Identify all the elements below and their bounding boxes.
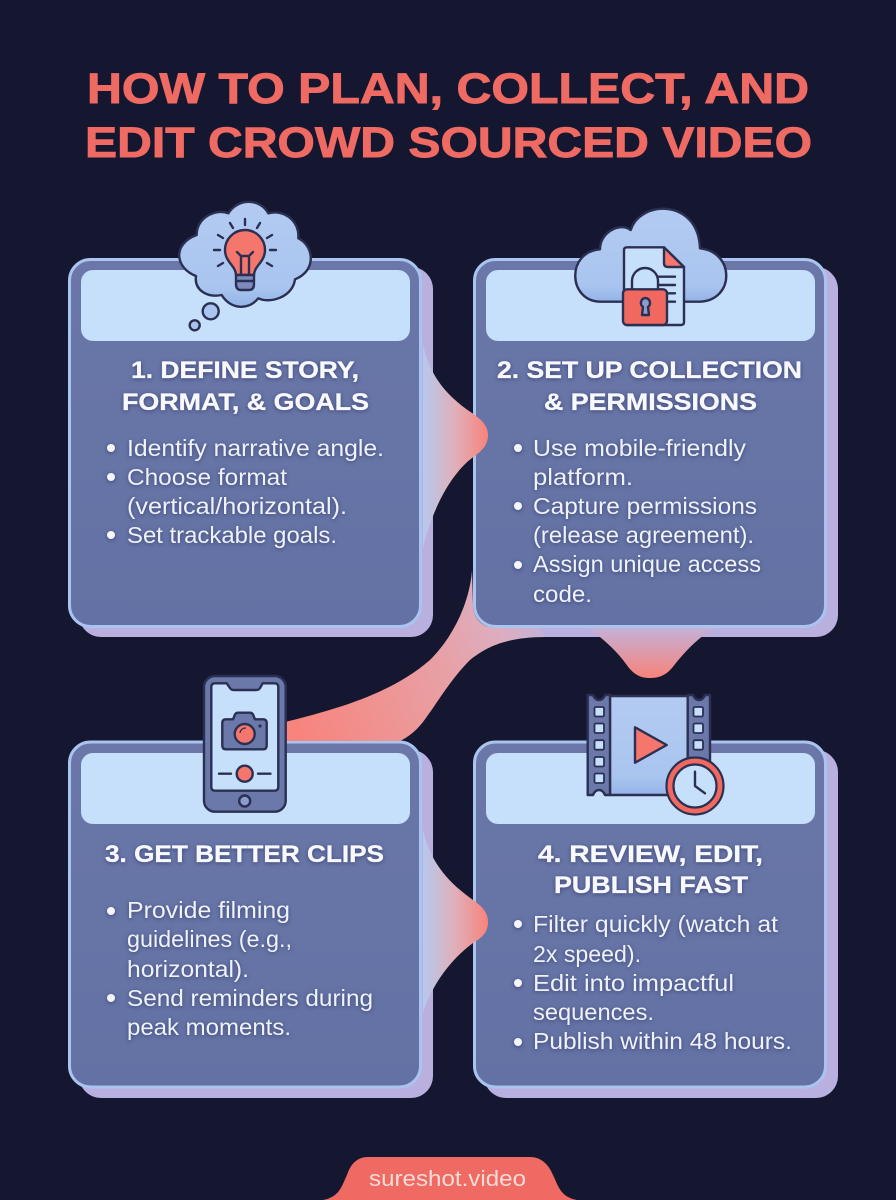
bullet list: step 1	[107, 435, 384, 548]
bullet list: step 4: Filter quickly (watch at	[533, 911, 778, 937]
bullet list: step 2: Use mobile-friendly	[533, 435, 746, 461]
bullet list: step 4: sequences.	[533, 999, 654, 1025]
title: EDIT CROWD SOURCED VIDEO	[85, 119, 812, 167]
panel: step 4 card	[474, 742, 838, 1098]
bullet list: step 3	[107, 897, 373, 1040]
arrow: step 2 to step 3	[285, 570, 545, 741]
bullet list: step 4: Edit into impactful	[533, 970, 734, 996]
heading: step 3: 3. GET BETTER CLIPS	[105, 841, 384, 868]
bullet list: step 4: 2x speed).	[533, 941, 641, 967]
title: HOW TO PLAN, COLLECT, AND	[87, 65, 809, 113]
icon: light bulb in thought cloud	[179, 202, 311, 330]
bullet list: step 3: peak moments.	[127, 1014, 291, 1040]
panel: step 2 card	[474, 260, 838, 637]
bullet list: step 1: Choose format	[127, 464, 287, 490]
heading: step 1: FORMAT, & GOALS	[122, 389, 369, 416]
bullet list: step 2: (release agreement).	[533, 522, 754, 548]
heading: step 2: & PERMISSIONS	[544, 389, 757, 416]
bullet list: step 2: Assign unique access	[533, 551, 761, 577]
bullet list: step 4	[514, 911, 792, 1054]
heading: step 1: 1. DEFINE STORY,	[131, 357, 359, 384]
bullet list: step 3: Send reminders during	[127, 985, 373, 1011]
icon: film strip with play button and clock	[588, 695, 724, 814]
heading: step 4: 4. REVIEW, EDIT,	[538, 841, 763, 868]
heading: step 2: 2. SET UP COLLECTION	[497, 357, 802, 384]
bullet list: step 2: platform.	[533, 464, 633, 490]
bullet list: step 1: Set trackable goals.	[127, 522, 337, 548]
arrow: step 2 to step 4	[588, 628, 714, 678]
bullet list: step 4: Publish within 48 hours.	[533, 1028, 792, 1054]
bullet list: step 3: horizontal).	[127, 956, 249, 982]
footer tab: sureshot.video: sureshot.video	[369, 1166, 526, 1191]
panel: step 3 card	[70, 742, 433, 1098]
title	[85, 65, 812, 167]
panel: step 1 card	[70, 260, 433, 637]
arrow: step 1 to step 2	[423, 345, 488, 548]
heading: step 2	[497, 357, 802, 416]
arrow: step 3 to step 4	[423, 830, 488, 1013]
footer tab: sureshot.video	[323, 1157, 577, 1200]
bullet list: step 3: Provide filming	[127, 897, 290, 923]
bullet list: step 1: Identify narrative angle.	[127, 435, 384, 461]
heading: step 4	[538, 841, 763, 899]
bullet list: step 1: (vertical/horizontal).	[127, 493, 347, 519]
bullet list: step 3: guidelines (e.g.,	[127, 926, 292, 952]
icon: cloud with document and padlock	[575, 209, 726, 325]
heading: step 4: PUBLISH FAST	[554, 872, 748, 899]
icon: smartphone with camera	[204, 676, 286, 812]
heading: step 1	[122, 357, 369, 416]
bullet list: step 2: code.	[533, 581, 592, 607]
bullet list: step 2: Capture permissions	[533, 493, 757, 519]
bullet list: step 2	[514, 435, 761, 607]
